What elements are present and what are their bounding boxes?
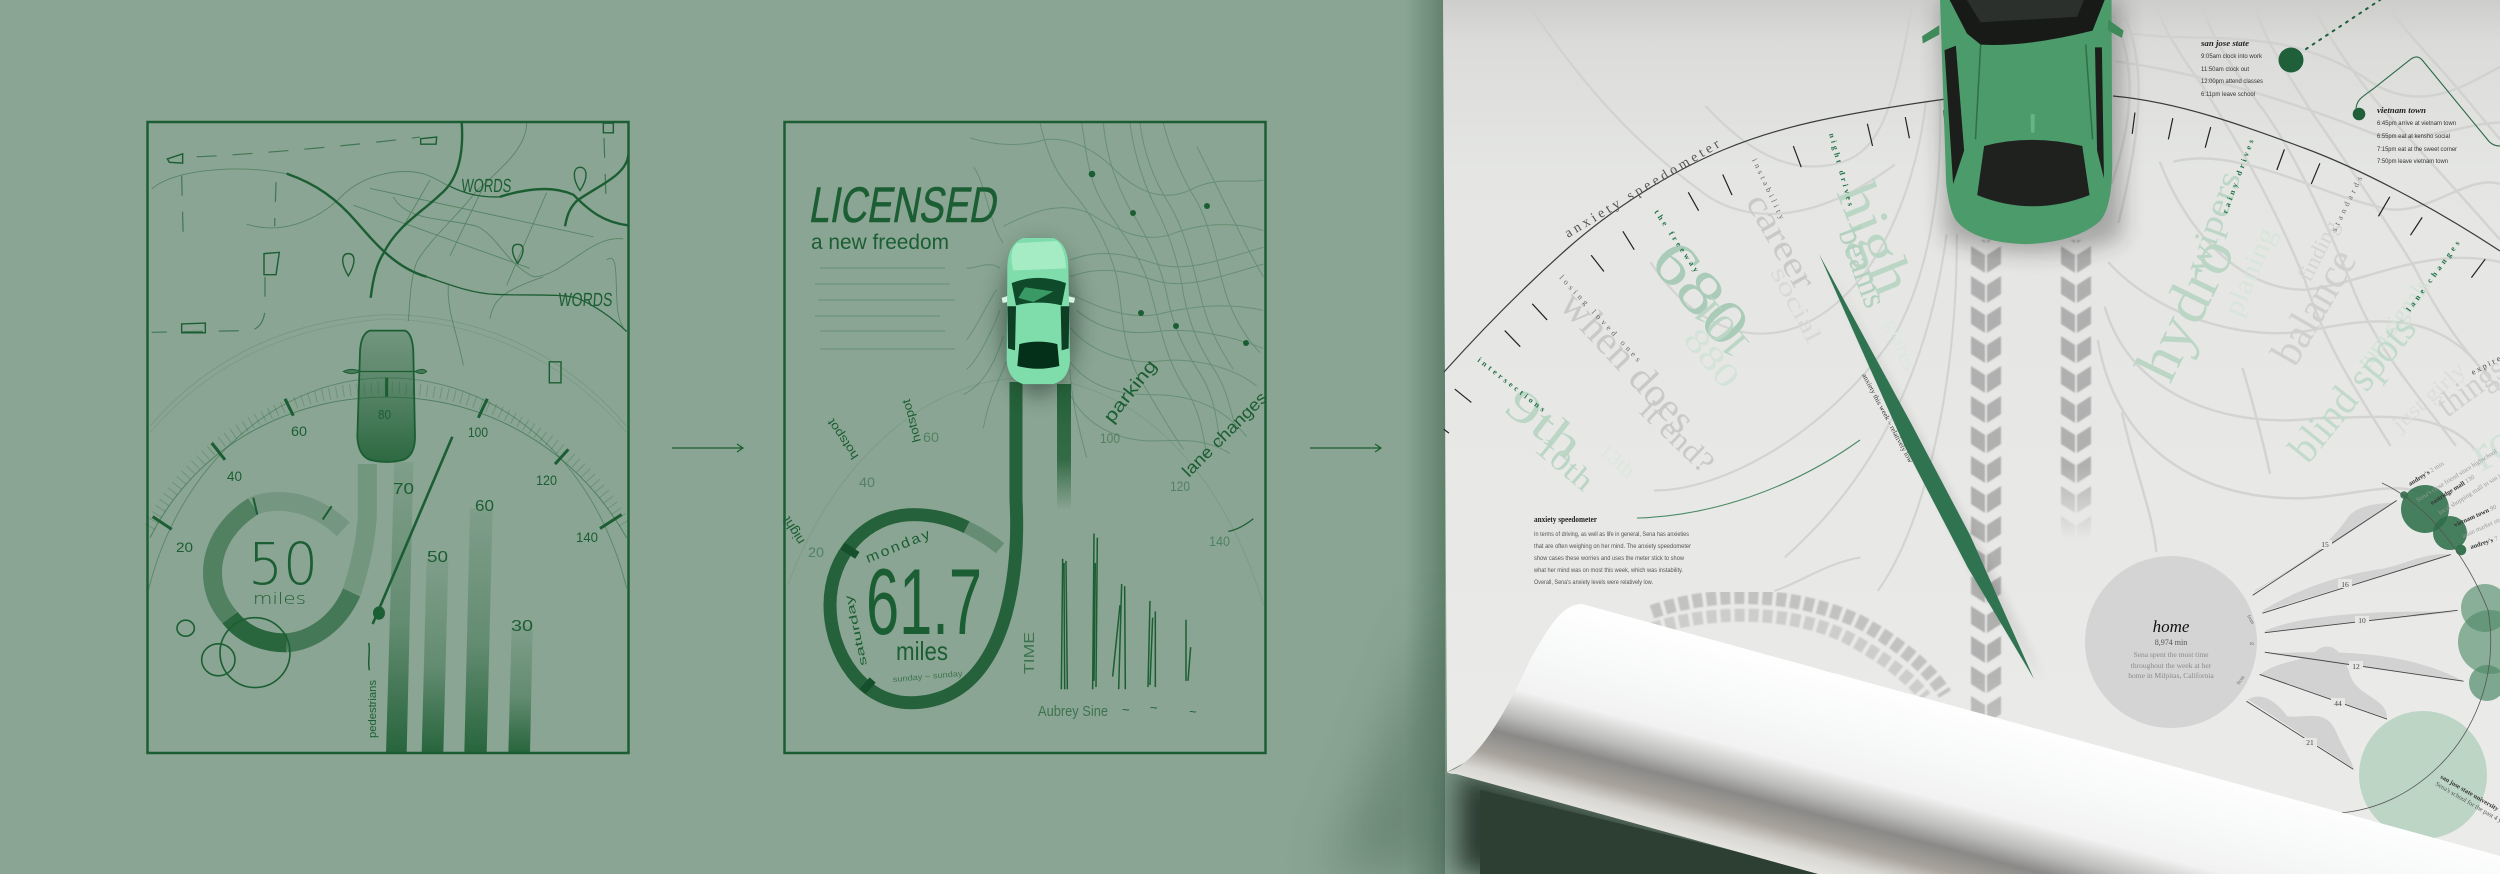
word cloud: left side of gauge: 680 — [1637, 227, 1763, 359]
arrow: layout to poster — [1310, 444, 1381, 452]
chart: commute minute labels: 21 — [2306, 738, 2314, 747]
location: san jose state schedule: 6:11pm leave school — [2201, 91, 2255, 98]
chart: commute area shapes — [2248, 502, 2463, 768]
faint speedometer arc — [788, 378, 1263, 605]
horizontal text placeholder lines — [815, 268, 955, 349]
chart: commute minute labels: 15 — [2321, 540, 2329, 549]
paper sheet — [1443, 0, 2500, 860]
hand labels: 61.7 — [866, 549, 982, 654]
route line to vietnam town — [2353, 57, 2500, 146]
chart: home circle: throughout the week at her — [2131, 661, 2212, 670]
overlap circles — [177, 618, 290, 688]
tire tracks behind car — [1970, 240, 2092, 730]
word cloud: right side of gauge: hydro — [2122, 227, 2247, 391]
hand labels: sunday ~ sunday — [892, 669, 963, 684]
location: san jose state schedule: 9:05am clock into work — [2201, 53, 2263, 60]
word cloud: left side of gauge: glares — [1880, 316, 1921, 374]
icon: green car top view — [1922, 0, 2124, 244]
panel: first pencil sketch — [148, 122, 628, 753]
hand labels: parking — [1099, 356, 1161, 426]
word cloud: small category labels left: night drives — [1827, 132, 1855, 207]
chart: commute minute labels: 12 — [2352, 662, 2360, 671]
text block: anxiety speedometer description — [1533, 515, 1692, 586]
word cloud: left side of gauge — [1496, 173, 1927, 498]
word cloud: right side of gauge: finding — [2292, 216, 2344, 285]
word cloud: small category labels left — [1476, 132, 1855, 414]
chart: commute arrows — [2247, 501, 2463, 769]
sketch labels: 50 — [427, 549, 448, 566]
faint map and road curves — [1526, 3, 1957, 591]
word cloud: small category labels left: losing loved ones — [1558, 273, 1643, 363]
word cloud: small category labels left: intersections — [1476, 355, 1547, 414]
word cloud: right side of gauge: planing — [2218, 223, 2283, 321]
word cloud: left side of gauge: high — [1824, 173, 1927, 303]
needle — [1819, 254, 2034, 679]
sketch labels — [176, 176, 613, 738]
hand labels: TIME — [1021, 632, 1038, 674]
chart: home circle: home — [2153, 617, 2190, 636]
chart: destination circles — [2340, 483, 2500, 839]
hand labels: lane changes — [1178, 388, 1271, 481]
text block: anxiety speedometer description: Overall, Sena's anxiety levels were relatively low. — [1534, 579, 1653, 586]
word cloud: left side of gauge: beams — [1830, 222, 1894, 313]
chart: destination labels: audrey's 7 — [2469, 535, 2500, 551]
chart: home circle: to — [2250, 642, 2254, 647]
sketch labels: WORDS — [461, 176, 512, 197]
text block: anxiety speedometer description: In terms of driving, as well as life in general, Sena has anxieties — [1534, 531, 1690, 538]
subtitle: a new freedom — [811, 231, 949, 254]
hand labels: ~ — [1189, 704, 1197, 719]
hand labels: 120 — [1170, 478, 1190, 494]
speedometer arc — [1444, 96, 2500, 372]
sketch labels: 120 — [536, 472, 557, 488]
heading: anxiety speedometer: anxiety speedometer — [1562, 137, 1723, 241]
sketch frame — [148, 122, 628, 753]
word cloud: left side of gauge: it end? — [1633, 393, 1721, 480]
word cloud: small category labels right: standards — [2330, 175, 2364, 233]
chart: commute minute labels: 16 — [2341, 580, 2349, 589]
location dots — [1089, 171, 1249, 346]
sketch car — [357, 331, 415, 462]
word cloud: small category labels left: instability — [1750, 157, 1786, 221]
chart: home circle: from — [2245, 614, 2255, 626]
bars — [386, 462, 533, 753]
chart: destination labels: audrey's 2 min — [2407, 460, 2446, 488]
hand labels: 60 — [923, 429, 939, 445]
chart: commute minute labels: 10 — [2358, 616, 2366, 625]
hand labels: ~ — [1150, 700, 1158, 715]
sketch labels: 30 — [511, 618, 533, 635]
hand labels: miles — [896, 636, 948, 666]
word cloud: left side of gauge: 13th — [1595, 439, 1639, 482]
location: san jose state schedule: 11:50am clock out — [2201, 66, 2249, 73]
chart: destination labels — [2407, 448, 2500, 830]
sketch labels: pedestrians — [367, 679, 379, 738]
text block: anxiety speedometer description: show cases these worries and uses the meter stick to show — [1534, 555, 1684, 562]
hand labels: hotspot — [824, 416, 861, 462]
word cloud: right side of gauge: balance — [2261, 240, 2366, 373]
location: san jose state schedule — [2200, 38, 2264, 98]
hand labels: Aubrey Sine — [1038, 703, 1108, 720]
car shadow — [1940, 0, 2122, 253]
arrow: sketch to layout — [672, 444, 743, 452]
location dot and dotted route — [2278, 0, 2380, 72]
sketch labels: 60 — [291, 423, 307, 439]
chart: home circle — [2085, 556, 2257, 728]
green arc — [1637, 440, 1860, 518]
needle caption: anxiety this week – relatively low — [1860, 372, 1915, 465]
paper curl — [1447, 604, 2500, 874]
title: LICENSED — [806, 176, 1003, 233]
location: vietnam town schedule: 6:45pm arrive at vietnam town — [2377, 120, 2456, 127]
hand labels: 40 — [859, 474, 875, 490]
word cloud: small category labels left: the freeway — [1652, 208, 1701, 274]
location: vietnam town schedule — [2377, 105, 2458, 165]
location: san jose state schedule: 12:00pm attend classes — [2201, 78, 2264, 85]
hand labels: 140 — [1209, 533, 1230, 549]
chart: home circle: from — [2237, 675, 2246, 686]
text block: anxiety speedometer description: anxiety speedometer — [1534, 515, 1597, 524]
word cloud: right side of gauge: wipers — [2178, 166, 2248, 278]
loop of tire track — [213, 464, 367, 643]
hand labels: 20 — [808, 544, 824, 560]
sketch frame — [784, 122, 1266, 753]
needle shadow — [1825, 262, 2044, 682]
chart: destination labels: Sena's close friend since highschool — [2415, 448, 2499, 504]
location: vietnam town schedule: 7:50pm leave vietnam town — [2377, 158, 2448, 165]
hand labels: ~ — [1122, 702, 1130, 717]
location: vietnam town schedule: 7:15pm eat at the sweet corner — [2377, 146, 2458, 153]
word cloud: left side of gauge: 101 — [1682, 289, 1759, 368]
text block: anxiety speedometer description: that are often weighing on her mind. The anxiety speedometer — [1534, 543, 1692, 550]
chart: home circle: home in Milpitas, California — [2128, 671, 2214, 680]
curved tire track — [1652, 597, 1945, 697]
chart: destination labels: eastridge mall 130 — [2429, 474, 2476, 507]
bar sketches — [1061, 519, 1253, 689]
chart: destination labels: vietnam town 90 — [2453, 504, 2498, 529]
icon: mint car — [1002, 238, 1075, 384]
word cloud: small category labels right: rainy drives — [2220, 138, 2256, 215]
tire track loop — [830, 382, 1017, 703]
hand labels — [779, 356, 1271, 720]
word cloud: left side of gauge: social — [1765, 263, 1826, 348]
sketch labels: 140 — [576, 529, 598, 545]
word cloud: small category labels right: lane changes — [2404, 239, 2462, 313]
chart: home circle: Sena spent the most time — [2134, 650, 2209, 659]
word cloud: left side of gauge: 10th — [1529, 430, 1600, 498]
sketch labels: 40 — [227, 468, 242, 484]
panel: second refined sketch — [779, 122, 1271, 753]
speedometer ticks — [153, 378, 622, 529]
hand labels: night — [779, 514, 808, 547]
word cloud: small category labels right — [2220, 138, 2500, 377]
hand labels: hotspot — [899, 397, 924, 444]
location: vietnam town schedule: 6:55pm eat at kensho social — [2377, 133, 2450, 140]
fading right tire track — [1057, 384, 1071, 510]
paper drop shadow — [1330, 0, 1830, 874]
word cloud: left side of gauge: 9th — [1496, 378, 1593, 470]
sketch drawing — [148, 122, 628, 753]
word cloud: left side of gauge: when does — [1551, 281, 1705, 442]
shadow of mint car — [1001, 244, 1077, 396]
word cloud: right side of gauge — [2122, 166, 2500, 482]
sketch labels: 50 — [248, 530, 318, 598]
location: san jose state schedule: san jose state — [2200, 38, 2249, 48]
chart: commute minute labels — [2303, 540, 2369, 747]
sketch labels: miles — [253, 589, 306, 608]
word cloud: right side of gauge: blind spots — [2280, 306, 2426, 471]
speedometer ticks — [1444, 110, 2485, 433]
sketch labels: 20 — [176, 539, 193, 555]
panel: printed poster paper — [1443, 0, 2500, 860]
location: vietnam town schedule: vietnam town — [2377, 105, 2426, 115]
chart: destination labels: san jose state university — [2439, 774, 2500, 813]
hand labels: saturday — [843, 593, 870, 667]
sketch labels: 70 — [393, 481, 414, 498]
hand labels: monday — [863, 525, 934, 566]
hand labels: 100 — [1100, 430, 1120, 446]
needle — [373, 437, 452, 624]
word cloud: right side of gauge: turn signals — [2352, 274, 2436, 374]
word cloud: left side of gauge: career — [1738, 186, 1825, 296]
chart: commute minute labels: 44 — [2334, 699, 2342, 708]
green sliver under curl — [1760, 668, 1850, 690]
text block: anxiety speedometer description: what her mind was on most this week, which was instability. — [1533, 567, 1683, 574]
street map lines — [963, 123, 1263, 458]
chart: home circle: 8,974 min — [2155, 638, 2187, 647]
word cloud: left side of gauge: 880 — [1676, 321, 1747, 396]
sketch labels: WORDS — [558, 290, 613, 311]
word cloud: right side of gauge: just girly — [2386, 357, 2470, 436]
sketch labels: 60 — [475, 498, 494, 515]
sketch labels: 100 — [468, 424, 488, 440]
sketch labels: 80 — [378, 407, 391, 422]
